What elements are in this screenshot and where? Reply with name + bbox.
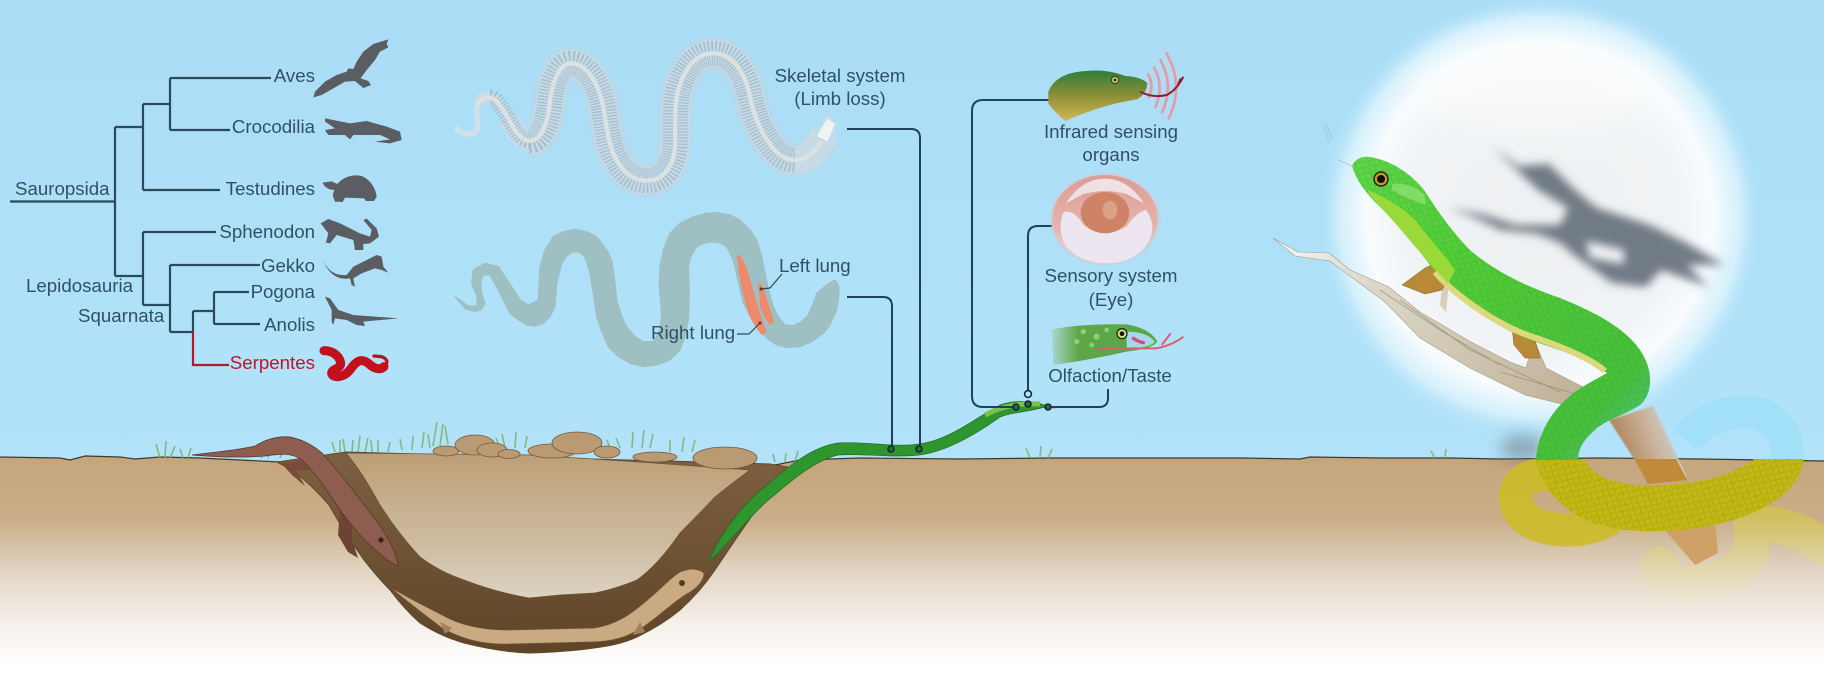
- infrared pit viper head: [1048, 53, 1183, 121]
- taxon labels: Testudines: [226, 178, 315, 199]
- lower left coil: [1515, 474, 1612, 530]
- taxon labels: Aves: [274, 65, 315, 86]
- rock mound: [433, 432, 757, 469]
- lung and skeleton labels: Skeletal system: [775, 65, 905, 86]
- sensory labels: [1044, 121, 1178, 386]
- icon: red snake: [324, 351, 387, 377]
- taxon labels: Lepidosauria: [26, 275, 134, 296]
- sensory labels: (Eye): [1089, 289, 1133, 310]
- right lung: [737, 255, 767, 335]
- sensory labels: Sensory system: [1045, 265, 1177, 286]
- taxon labels: [15, 65, 316, 373]
- leaves: [1402, 256, 1540, 358]
- trunk through ground: [1609, 406, 1718, 565]
- phylogenetic tree: [10, 78, 271, 365]
- snake shadow on sun: [1449, 148, 1724, 287]
- burrow tunnel: [277, 452, 793, 653]
- connector end dots: [888, 391, 1051, 452]
- sun glow: [1318, 0, 1762, 439]
- lung anatomy snake: [455, 213, 839, 367]
- tan burrowing lizard: [390, 569, 704, 644]
- yellow coil: [1556, 445, 1781, 508]
- taxon labels: Sauropsida: [15, 178, 110, 199]
- icon: bird: [313, 39, 388, 97]
- lung leader lines: [737, 274, 782, 334]
- icon: crocodile: [325, 118, 402, 143]
- skeleton snake: [457, 53, 837, 181]
- lung and skeleton labels: (Limb loss): [794, 88, 886, 109]
- blue ghost coil: [1685, 412, 1787, 470]
- connector lines: [847, 100, 1108, 449]
- sky background: [0, 0, 1824, 470]
- green snake crossing the ground: [709, 401, 1056, 561]
- taxon labels: Gekko: [261, 255, 315, 276]
- icon: lizard: [325, 297, 398, 326]
- icon: gecko: [322, 255, 388, 287]
- olfaction snake head: [1052, 324, 1183, 365]
- sensory labels: Olfaction/Taste: [1048, 365, 1172, 386]
- taxon labels: Squarnata: [78, 305, 165, 326]
- taxon labels: Anolis: [264, 314, 315, 335]
- ground: [0, 453, 1824, 693]
- sensory labels: Infrared sensing: [1044, 121, 1178, 142]
- grass tufts: [156, 422, 1446, 462]
- taxon labels: Sphenodon: [219, 221, 315, 242]
- taxon labels: Serpentes: [230, 352, 315, 373]
- faded lower right coil: [1660, 524, 1824, 585]
- ground line: [0, 456, 1824, 466]
- taxon silhouettes: [313, 39, 402, 377]
- icon: tuatara: [321, 219, 379, 250]
- lung and skeleton labels: Left lung: [779, 255, 851, 276]
- main green snake: [1324, 122, 1650, 460]
- icon: turtle: [323, 175, 377, 202]
- dry branch: [1273, 238, 1610, 408]
- eye cross-section: [1050, 173, 1160, 265]
- lung and skeleton labels: Right lung: [651, 322, 735, 343]
- lung and skeleton labels: [651, 65, 905, 343]
- taxon labels: Pogona: [251, 281, 316, 302]
- brown lizard with limbs: [192, 437, 398, 566]
- left lung: [758, 283, 774, 325]
- burrow inner mound: [346, 453, 750, 598]
- sensory labels: organs: [1082, 144, 1140, 165]
- underground shadow smudge: [1500, 434, 1544, 462]
- taxon labels: Crocodilia: [232, 116, 316, 137]
- infrared waves: [1147, 53, 1176, 119]
